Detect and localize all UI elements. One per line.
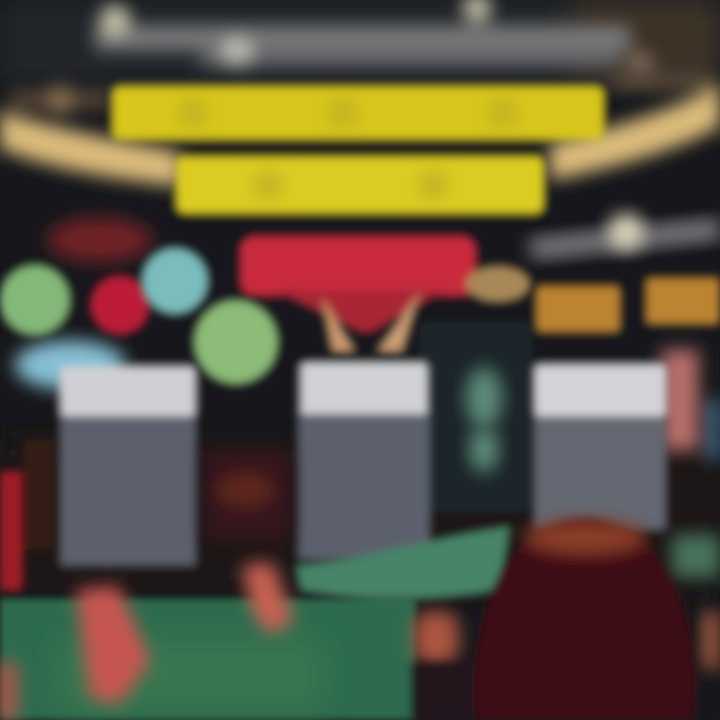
- gold light bands: [0, 72, 720, 186]
- chip stacks: [0, 562, 458, 720]
- green table: [296, 526, 510, 599]
- header strip: [95, 0, 654, 79]
- card one: [60, 366, 196, 566]
- right table edge: [672, 535, 720, 577]
- title: [112, 86, 604, 214]
- right edge accents: [662, 350, 720, 460]
- foreground head: [475, 518, 720, 720]
- red sign: [240, 236, 530, 352]
- card three: [534, 364, 666, 530]
- card two: [298, 362, 430, 560]
- balloons: [0, 218, 278, 389]
- left edge red figure: [0, 440, 54, 590]
- right signage: [529, 214, 720, 332]
- foreground dark table edge: [412, 662, 480, 720]
- dark panel with figure: [420, 322, 532, 512]
- mid-left figure: [205, 450, 290, 540]
